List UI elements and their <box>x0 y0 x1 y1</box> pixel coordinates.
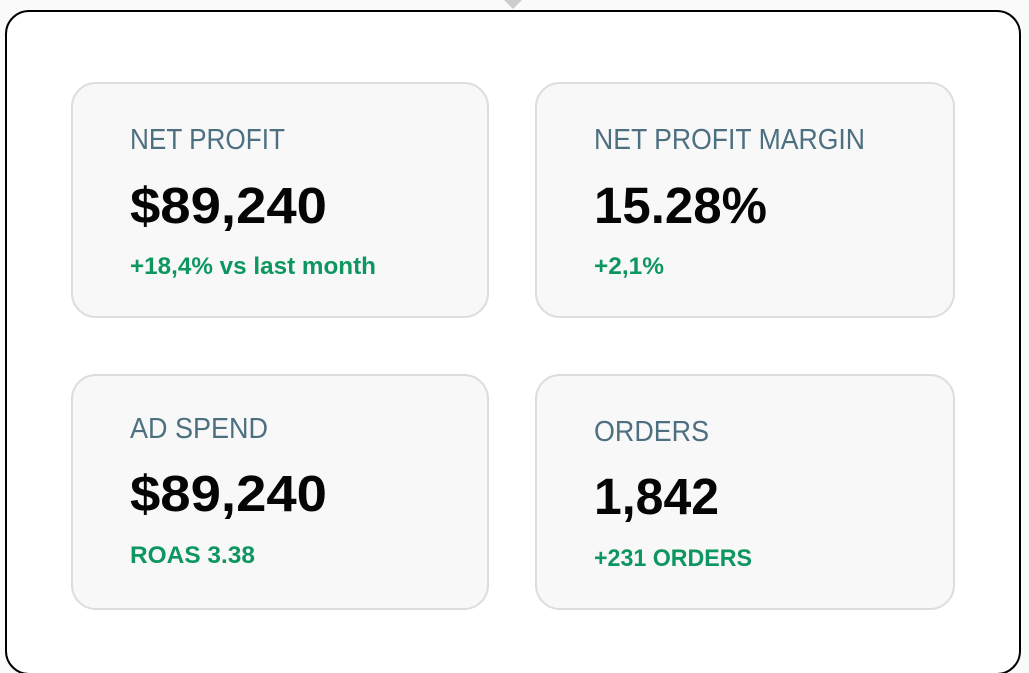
change: orders: +231 ORDERS <box>594 545 752 572</box>
panel: ad spend <box>72 375 488 609</box>
change: net profit margin: +2,1% <box>594 253 664 280</box>
panel: net profit <box>72 83 488 317</box>
label: ad spend: AD SPEND <box>130 413 268 445</box>
panel: net profit margin <box>536 83 954 317</box>
label: orders: ORDERS <box>594 416 709 448</box>
label: net profit margin: NET PROFIT MARGIN <box>594 124 865 156</box>
panel: orders <box>536 375 954 609</box>
value: orders: 1,842 <box>594 468 719 525</box>
change: net profit: +18,4% vs last month <box>130 253 376 280</box>
label: net profit: NET PROFIT <box>130 124 285 156</box>
value: ad spend: $89,240 <box>130 465 327 522</box>
value: net profit margin: 15.28% <box>594 177 767 234</box>
value: net profit: $89,240 <box>130 177 327 234</box>
change: ROAS: ROAS 3.38 <box>130 542 255 569</box>
icon: top pointer diamond <box>504 0 522 9</box>
